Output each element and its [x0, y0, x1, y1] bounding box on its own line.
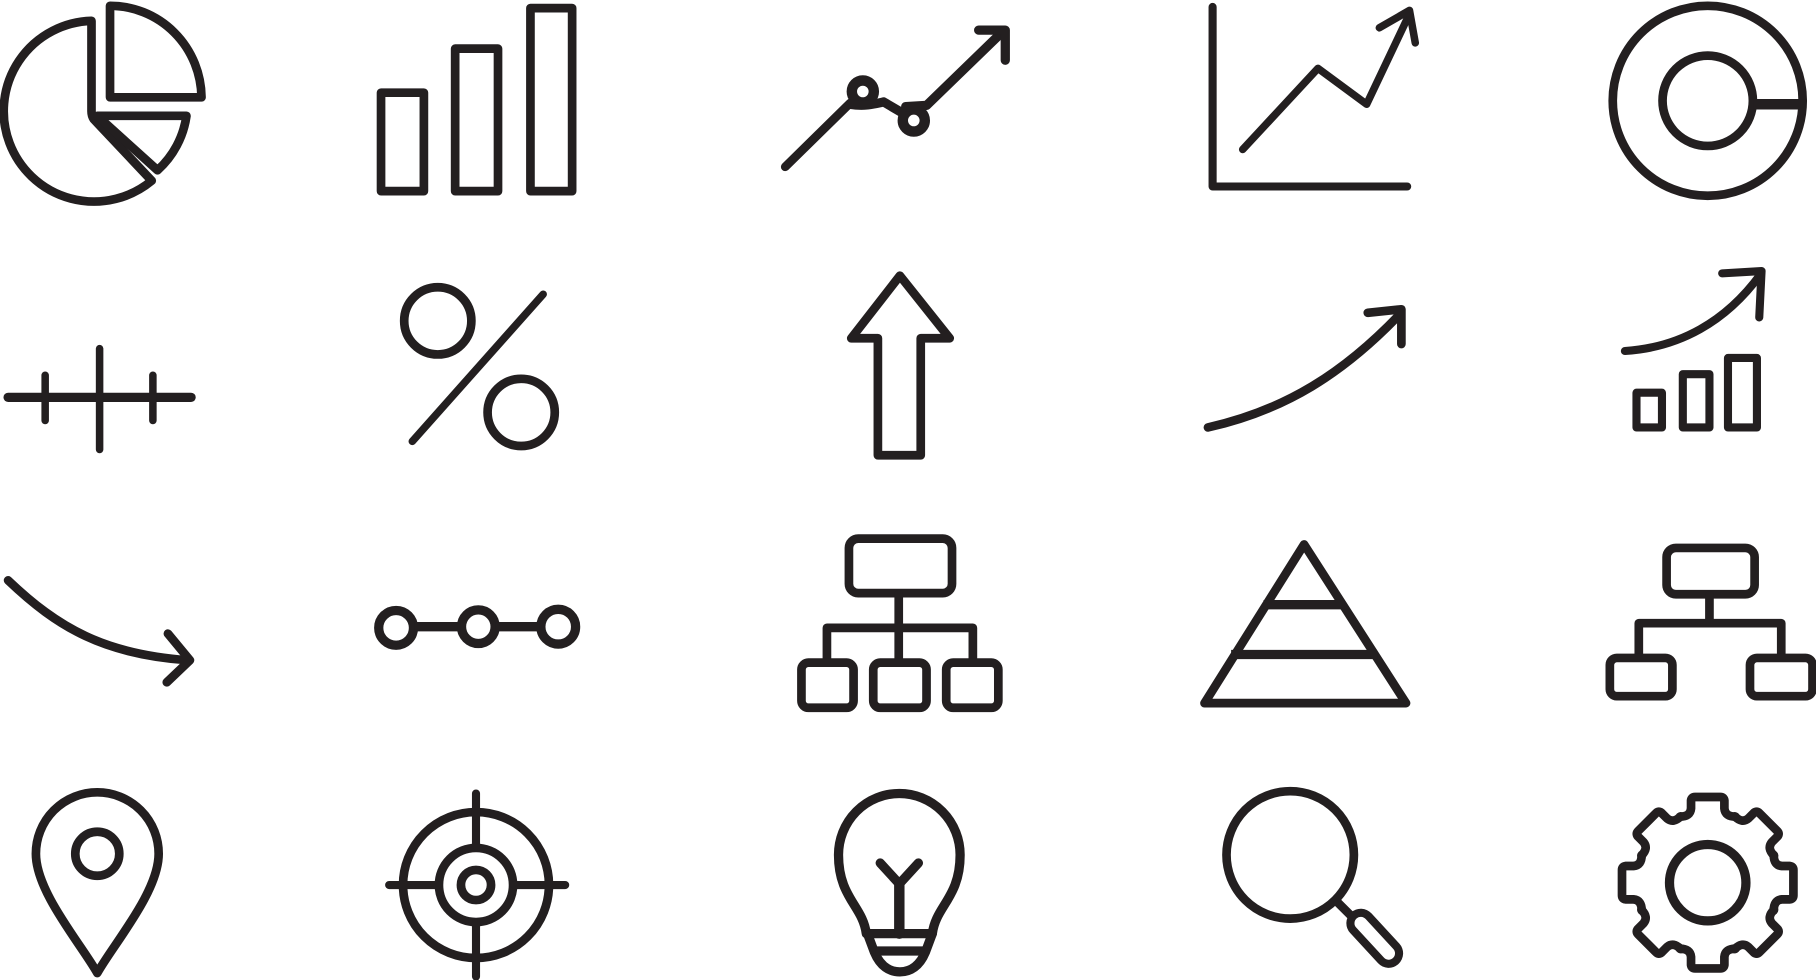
icon: target — [389, 793, 565, 977]
icon: org chart with two children — [1610, 548, 1813, 696]
icon: line chart with arrow — [1213, 7, 1415, 187]
icon: up arrow — [851, 276, 950, 455]
icon: trend line with points — [785, 30, 1005, 167]
icon: donut chart — [1613, 6, 1803, 196]
icon: bar chart — [381, 8, 572, 191]
icon: growth arrow with bars — [1625, 271, 1762, 427]
icon: axis ticks — [8, 349, 191, 449]
icon: falling curved arrow — [8, 580, 190, 682]
icon: layered pyramid — [1204, 544, 1406, 703]
icon: location pin — [36, 792, 159, 973]
icon: light bulb — [839, 793, 960, 972]
icon: percent sign — [404, 287, 555, 446]
icon: connected dots — [379, 609, 576, 645]
icon: rising curved arrow — [1208, 309, 1401, 427]
icon: org chart with three children — [801, 539, 998, 708]
icon: magnifying glass — [1226, 791, 1389, 953]
icon: gear — [1622, 797, 1793, 968]
icon: pie chart — [4, 6, 202, 202]
